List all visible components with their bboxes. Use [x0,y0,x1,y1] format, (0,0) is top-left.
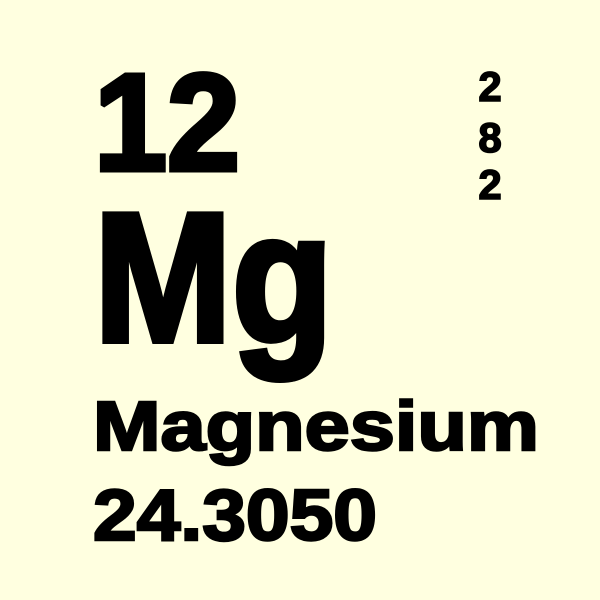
atomic weight: 24.3050 [93,476,377,556]
element symbol: Mg [94,174,333,380]
electron shells: 2 [478,63,502,110]
element name: Magnesium [93,387,539,465]
electron shells: 2 [478,161,502,208]
electron shells: 8 [478,114,502,161]
electron shells [478,63,502,208]
atomic number: 12 [94,46,240,200]
